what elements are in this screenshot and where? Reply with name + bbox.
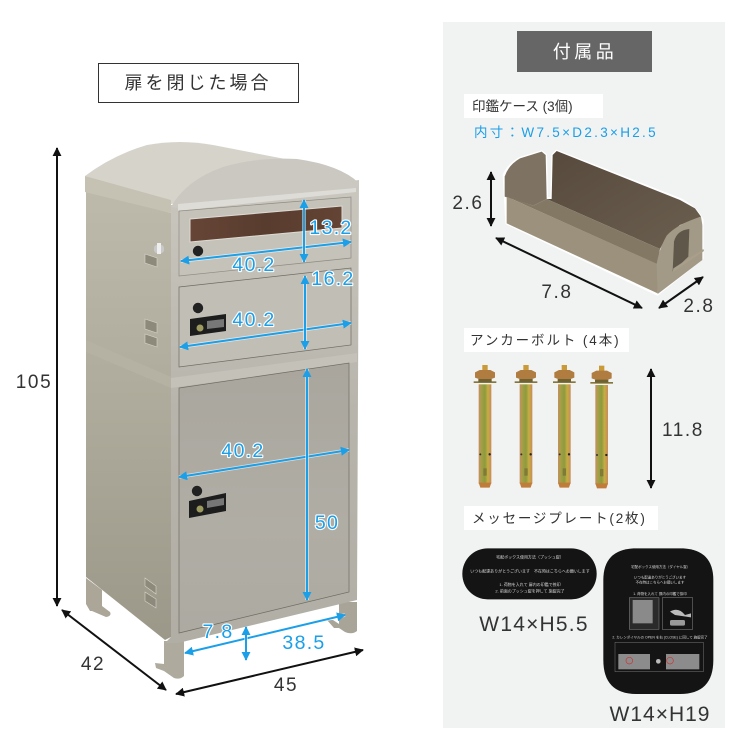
- label: stamp case: [464, 94, 603, 118]
- size: small plate: W14×H5.5: [479, 613, 589, 636]
- message plate large: 1. 荷物を入れて 扉内の印鑑で捺印: [633, 591, 687, 596]
- blue dimensions: base: 7.8: [202, 621, 234, 643]
- message plate small: 宅配ボックス使用方法（プッシュ錠）: [496, 553, 564, 559]
- heading: door closed: 扉を閉じた場合: [124, 73, 272, 93]
- back wall: [547, 151, 701, 249]
- size: large plate: W14×H19: [610, 703, 710, 726]
- knob: [193, 246, 203, 256]
- blue dimensions: top door: 13.2: [309, 217, 353, 239]
- knob: [192, 486, 202, 496]
- message plate large: いつも配達ありがとうございます: [634, 574, 687, 579]
- case dimensions: 2.6: [452, 193, 484, 214]
- blue dimensions: bottom door: 50: [315, 512, 339, 534]
- case dimensions: 7.8: [541, 282, 573, 303]
- end window: [673, 229, 689, 272]
- combination lock: [190, 314, 226, 336]
- roof: [85, 142, 359, 204]
- middle door: [179, 268, 351, 367]
- inner size: 内寸：W7.5×D2.3×H2.5: [474, 125, 658, 140]
- label: anchor bolts: アンカーボルト (4本): [470, 333, 621, 348]
- blue dimensions: bottom door: 40.2: [221, 440, 265, 462]
- blue dimensions: base: 38.5: [282, 632, 326, 654]
- side wall: [86, 190, 171, 640]
- bolt dimension: [651, 369, 704, 488]
- case dimensions: [452, 172, 715, 317]
- label: message plates: メッセージプレート(2枚): [472, 511, 647, 526]
- front frame: [165, 180, 359, 643]
- left wall: [505, 152, 547, 206]
- message plate small: いつも配達ありがとうございます 不在時はこちらへお願いします: [470, 567, 590, 573]
- blue dimensions: top door: [181, 200, 353, 276]
- right rear leg: [327, 602, 357, 633]
- message plate large: 2. カレンダイヤルの OPEN を右 (CLOSE) に回して 施錠完了: [612, 634, 708, 639]
- label: stamp case: 印鑑ケース (3個): [472, 98, 573, 114]
- anchor bolts: [474, 365, 613, 488]
- heading: accessories: [517, 31, 652, 72]
- bolt dimension: 11.8: [662, 420, 704, 441]
- stamp case illustration: [504, 151, 704, 294]
- side panel background: [443, 22, 725, 728]
- blue dimensions: middle door: 16.2: [311, 268, 355, 290]
- combination lock: [189, 493, 226, 518]
- message plate small: [462, 548, 597, 599]
- heading: door closed: [98, 64, 298, 102]
- blue dimensions: middle door: 40.2: [232, 309, 276, 331]
- top door: [179, 197, 351, 276]
- band: [171, 353, 357, 388]
- knob: [193, 303, 203, 313]
- message plate small: 2. 前面のプッシュ錠を押して 施錠完了: [495, 588, 565, 594]
- front left leg: [155, 641, 184, 679]
- end face: [657, 217, 702, 294]
- blue dimensions: top door: 40.2: [232, 254, 276, 276]
- black dimensions: overall: 105: [16, 372, 52, 393]
- blue dimensions: middle door: [180, 268, 355, 349]
- label: anchor bolts: [464, 328, 629, 352]
- vents: [145, 254, 157, 608]
- roof front arch: [171, 159, 359, 208]
- message plate small: 1. 荷物を入れて 扉内の印鑑で捺印: [499, 581, 561, 587]
- roof rim: [85, 176, 171, 213]
- label: message plates: [464, 506, 658, 530]
- message plate large: [603, 548, 713, 694]
- blue dimensions: bottom door: [179, 369, 349, 600]
- blue dimensions: base: [185, 615, 345, 660]
- case dimensions: 2.8: [683, 296, 715, 317]
- bottom door: [179, 363, 349, 633]
- front face: [507, 197, 658, 293]
- heading: accessories: 付属品: [553, 42, 617, 62]
- key: [154, 243, 164, 254]
- black dimensions: overall: 42: [81, 654, 105, 675]
- left rear leg: [86, 578, 110, 617]
- wood panel: [190, 206, 342, 242]
- mailbox cabinet: [85, 142, 359, 679]
- message plate large: 宅配ボックス使用方法（ダイヤル錠）: [631, 564, 690, 569]
- black dimensions: overall: 45: [274, 675, 298, 696]
- floor: [507, 197, 660, 264]
- message plate large: 不在時はこちらへお願いします: [636, 580, 685, 585]
- black dimensions: overall: [16, 148, 363, 696]
